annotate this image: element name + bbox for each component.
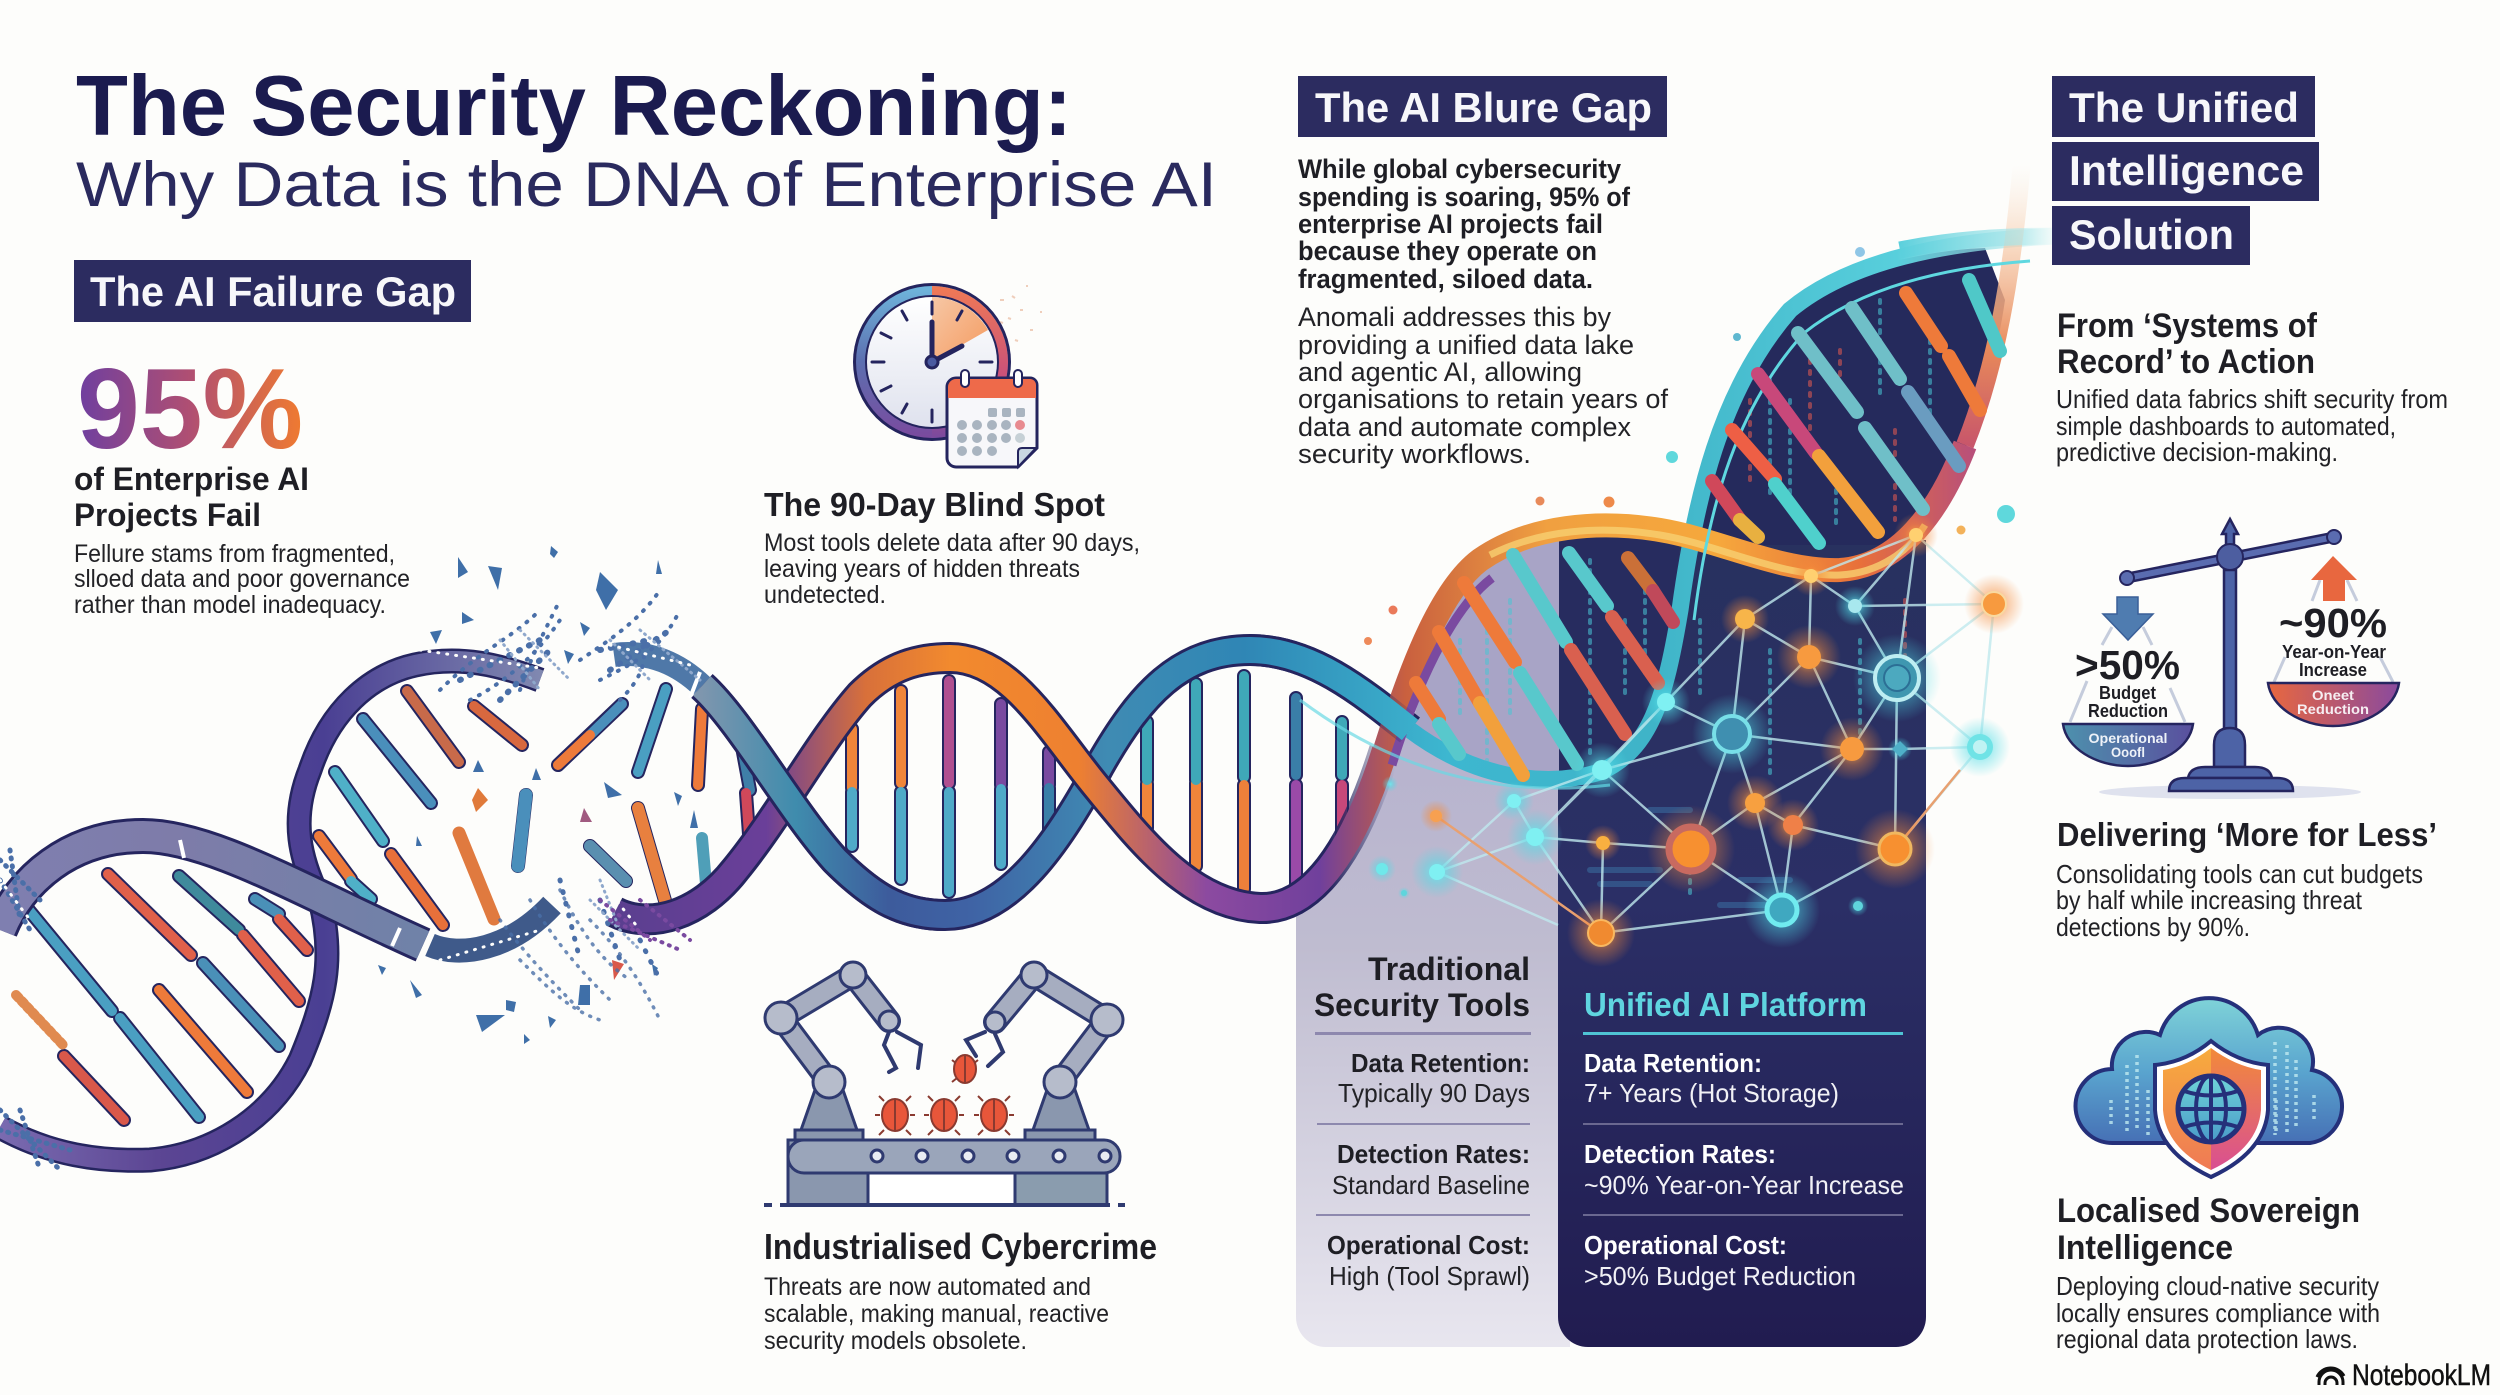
bold paragraph: spending is soaring, 95% of [1298, 182, 1631, 212]
row: detection rates: Standard Baseline [1332, 1170, 1530, 1200]
bold paragraph: While global cybersecurity [1298, 154, 1621, 184]
regular paragraph: providing a unified data lake [1298, 330, 1634, 360]
text: the 90-day blind spot: The 90-Day Blind Spot [764, 486, 1105, 523]
title: The Security Reckoning: [76, 59, 1072, 154]
row: operational cost: >50% Budget Reduction [1584, 1261, 1856, 1291]
regular paragraph: organisations to retain years of [1298, 384, 1668, 414]
heading tag: Solution [2069, 211, 2234, 258]
arrow: up [2311, 556, 2357, 601]
DNA strands: fractured left [0, 654, 702, 1160]
left value: >50% [2075, 642, 2180, 688]
stat label [74, 461, 309, 533]
right value: Year-on-Year [2282, 642, 2386, 662]
regular paragraph: data and automate complex [1298, 412, 1631, 442]
body text [74, 540, 410, 619]
regular paragraph: Anomali addresses this by [1298, 302, 1611, 332]
row: operational cost: Operational Cost: [1327, 1230, 1530, 1260]
conveyor [764, 1140, 1125, 1205]
heading tag: Intelligence [2069, 147, 2304, 194]
DNA rungs: intact middle section [852, 676, 1342, 902]
row: data retention: Typically 90 Days [1338, 1078, 1530, 1108]
icon: balance scale [2063, 519, 2399, 799]
robot arm: right [966, 962, 1123, 1140]
scale stand [2169, 519, 2293, 791]
bold paragraph [1298, 154, 1631, 294]
row: data retention [1584, 1048, 1839, 1108]
column heading: Security Tools [1314, 987, 1530, 1023]
column heading: Unified AI Platform [1584, 986, 1867, 1023]
row: operational cost: Operational Cost: [1584, 1230, 1787, 1260]
text: the 90-day blind spot: leaving years of hidden threats [764, 555, 1080, 583]
text: industrialised cybercrime: Industrialised Cybercrime [764, 1226, 1157, 1267]
network links [1437, 535, 1994, 933]
network glows [1368, 513, 2024, 967]
subtitle: Why Data is the DNA of Enterprise AI [76, 150, 1217, 220]
row: operational cost: High (Tool Sprawl) [1329, 1261, 1530, 1291]
icon: robot arms on conveyor [764, 962, 1125, 1205]
body text: rather than model inadequacy. [74, 591, 386, 619]
text: localised sovereign intelligence: regional data protection laws. [2056, 1324, 2358, 1354]
right value [2279, 600, 2387, 680]
icon: clock and calendar [853, 283, 1042, 467]
floating dots [1364, 247, 2015, 645]
left value [2075, 642, 2180, 721]
title block [76, 59, 1217, 220]
panel: traditional security tools [1314, 951, 1531, 1291]
body text: Unified data fabrics shift security from [2056, 384, 2448, 414]
stat label: of Enterprise AI [74, 461, 309, 497]
shield [2155, 1041, 2268, 1177]
row: data retention: 7+ Years (Hot Storage) [1584, 1078, 1839, 1108]
text: delivering more for less [2056, 816, 2437, 942]
arrow: down [2103, 597, 2153, 640]
text: delivering more for less: Delivering ‘More for Less’ [2057, 816, 2437, 853]
text: localised sovereign intelligence [2056, 1192, 2380, 1354]
row: operational cost [1584, 1230, 1856, 1291]
row: data retention: Data Retention: [1584, 1048, 1762, 1078]
row: detection rates [1584, 1139, 1904, 1200]
row: detection rates [1332, 1139, 1530, 1200]
panel: comparison backgrounds [1296, 248, 2005, 1347]
text: delivering more for less: Consolidating tools can cut budgets [2056, 859, 2423, 889]
right pan: Reduction [2297, 701, 2369, 717]
row: operational cost [1327, 1230, 1530, 1291]
section: the AI failure gap [74, 260, 471, 619]
heading: systems of record: From ‘Systems of [2057, 307, 2318, 345]
globe [2178, 1076, 2244, 1142]
network graph [1364, 247, 2024, 967]
text: the 90-day blind spot: Most tools delete data after 90 days, [764, 529, 1140, 557]
bold paragraph: enterprise AI projects fail [1298, 209, 1603, 239]
DNA strands: main helix [615, 160, 2060, 919]
text: localised sovereign intelligence: Localised Sovereign [2057, 1192, 2360, 1230]
text: localised sovereign intelligence: Deploying cloud-native security [2056, 1271, 2379, 1301]
stat: 95 percent: 95% [77, 346, 303, 473]
text: the 90-day blind spot [764, 486, 1140, 609]
left pan: Ooofl [2111, 745, 2145, 760]
right pan: Oneet [2312, 687, 2354, 703]
regular paragraph: and agentic AI, allowing [1298, 357, 1582, 387]
row: detection rates: Detection Rates: [1584, 1139, 1776, 1169]
heading: systems of record: Record’ to Action [2057, 343, 2315, 381]
text: industrialised cybercrime: scalable, making manual, reactive [764, 1300, 1109, 1328]
body text: slloed data and poor governance [74, 565, 410, 593]
body text [2056, 384, 2448, 467]
network nodes [1376, 528, 2006, 946]
left pan [2063, 724, 2193, 766]
left value: Reduction [2088, 701, 2168, 721]
bugs [875, 1055, 1014, 1135]
row: detection rates: Detection Rates: [1337, 1139, 1530, 1169]
row: data retention [1338, 1048, 1530, 1108]
regular paragraph: security workflows. [1298, 439, 1531, 469]
scale beam [2127, 537, 2334, 578]
body text: simple dashboards to automated, [2056, 411, 2396, 441]
right value: Increase [2299, 660, 2367, 680]
body text: Fellure stams from fragmented, [74, 540, 395, 568]
row: data retention: Data Retention: [1351, 1048, 1530, 1078]
row: detection rates: ~90% Year-on-Year Increase [1584, 1170, 1904, 1200]
text: the 90-day blind spot: undetected. [764, 581, 886, 609]
heading tag: The Unified [2069, 84, 2299, 131]
cloud [2075, 998, 2342, 1143]
text: delivering more for less: detections by 90%. [2056, 912, 2250, 942]
icon: cloud and shield [2075, 998, 2342, 1177]
text: industrialised cybercrime: Threats are now automated and [764, 1273, 1091, 1301]
DNA shards and particles [0, 546, 700, 1170]
text: delivering more for less: by half while increasing threat [2056, 885, 2363, 915]
section: unified intelligence solution [2052, 76, 2448, 467]
text: industrialised cybercrime: security models obsolete. [764, 1327, 1027, 1355]
data streams behind the DNA [1460, 300, 1930, 905]
column heading [1314, 951, 1530, 1023]
heading tag: The AI Blure Gap [1315, 84, 1652, 131]
heading: systems of record [2057, 307, 2318, 381]
left pan: Operational [2088, 731, 2168, 746]
body text: predictive decision-making. [2056, 437, 2338, 467]
text: localised sovereign intelligence: Intelligence [2057, 1229, 2233, 1267]
DNA helix [0, 160, 2060, 1170]
stat label: Projects Fail [74, 497, 261, 533]
left value: Budget [2099, 683, 2156, 703]
regular paragraph [1298, 302, 1668, 469]
DNA rung outlines [28, 676, 1342, 1120]
DNA rungs: glowing right section [1416, 280, 2000, 775]
text: localised sovereign intelligence: locally ensures compliance with [2056, 1298, 2380, 1328]
DNA rungs: fractured left section [16, 689, 750, 1120]
text: industrialised cybercrime [764, 1226, 1157, 1355]
heading tag [2052, 76, 2319, 265]
heading tag: The AI Failure Gap [90, 268, 456, 315]
column heading: Traditional [1368, 951, 1530, 987]
robot arm: left [765, 962, 921, 1140]
right value: ~90% [2279, 600, 2387, 646]
right pan [2268, 683, 2399, 726]
section: the AI blure gap [1298, 76, 1668, 469]
panel: unified AI platform [1583, 986, 1904, 1291]
bold paragraph: because they operate on [1298, 236, 1597, 266]
bold paragraph: fragmented, siloed data. [1298, 264, 1593, 294]
